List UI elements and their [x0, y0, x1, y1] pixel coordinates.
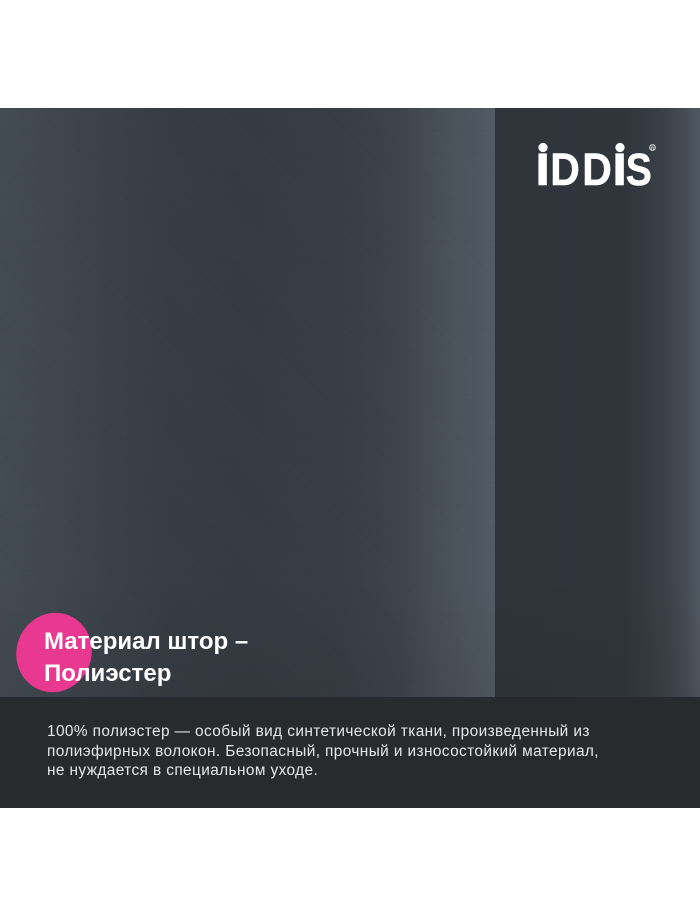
text block: description: полиэфирных волокон. Безопасный, прочный и износостойкий материал, [47, 743, 599, 760]
icon: pink accent blob [16, 612, 92, 692]
left curtain fold [0, 108, 495, 697]
heading: curtain material [44, 628, 248, 687]
panel: curtain fabric photo [0, 108, 700, 697]
text block: description: не нуждается в специальном уходе. [47, 762, 318, 779]
panel: description bar [0, 697, 700, 808]
right curtain fold [495, 108, 700, 697]
logo: IDDIS [535, 142, 656, 192]
fabric texture [0, 108, 495, 697]
text block: description [47, 723, 599, 779]
fabric ribstop lines [0, 108, 495, 697]
text block: description: 100% полиэстер — особый вид синтетической ткани, произведенный из [47, 723, 590, 740]
heading: curtain material: Материал штор – [44, 628, 248, 655]
logo: IDDIS: R [651, 146, 655, 150]
lower shading [0, 578, 700, 697]
heading: curtain material: Полиэстер [44, 660, 171, 687]
